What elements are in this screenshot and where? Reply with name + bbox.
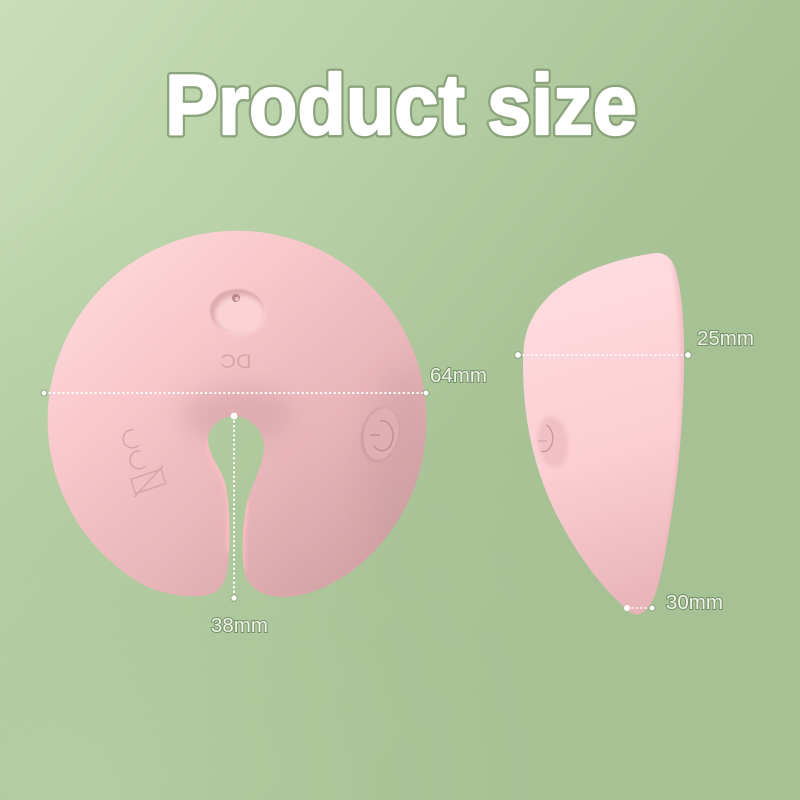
dimension: 38mm slot: 38mm — [211, 614, 268, 637]
icon: power button — [356, 404, 404, 466]
dimension: 25mm thickness — [515, 327, 754, 358]
icon: certification marks — [114, 424, 170, 497]
title: Product size — [165, 58, 637, 153]
icon: dc port — [210, 289, 265, 335]
dimension: 30mm tip — [624, 591, 723, 614]
icon: side power button — [535, 414, 571, 470]
dimension: 30mm tip: 30mm — [666, 591, 723, 614]
dimension: 64mm width — [41, 364, 487, 396]
icon: mirrored DC mark: DC — [220, 351, 252, 373]
shading — [184, 386, 288, 438]
dimension: 64mm width: 64mm — [430, 364, 487, 387]
dimension: 25mm thickness: 25mm — [697, 327, 754, 350]
title: Product size — [165, 58, 637, 153]
dimension: 38mm slot — [211, 413, 268, 637]
product side view — [523, 252, 684, 614]
product front view — [48, 230, 427, 597]
